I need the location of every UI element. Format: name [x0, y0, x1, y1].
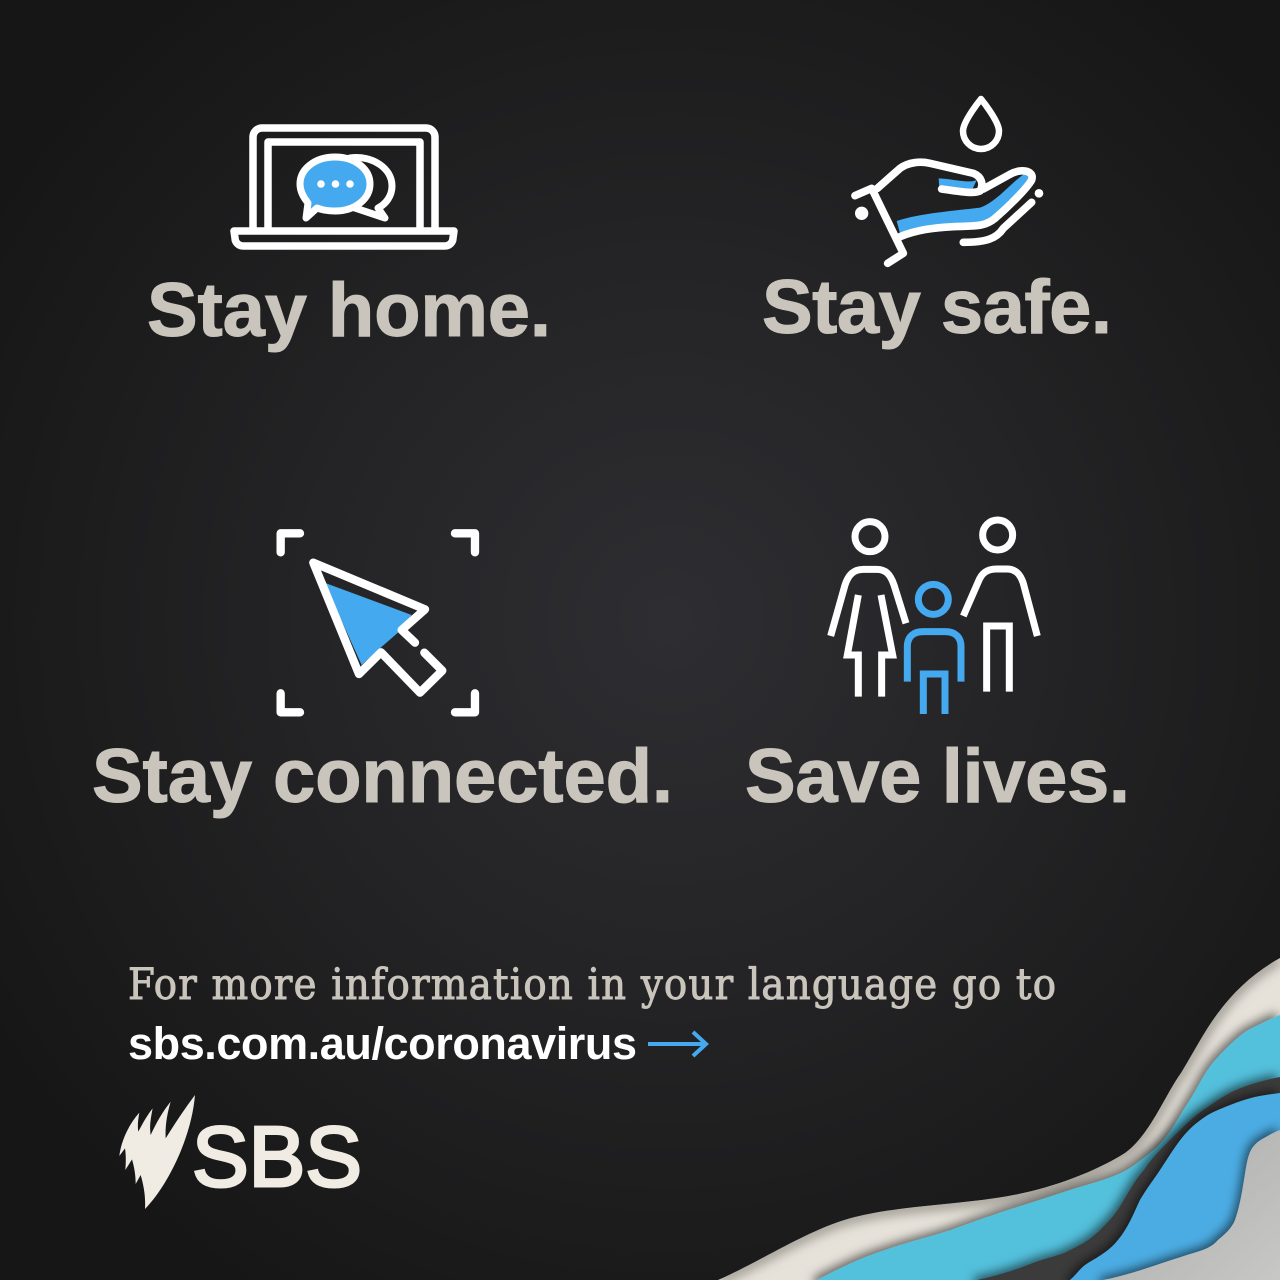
heading: Stay safe: Stay safe.: [762, 265, 1112, 350]
heading: Stay connected: Stay connected.: [92, 734, 673, 819]
text: website address: sbs.com.au/coronavirus: [128, 1018, 637, 1069]
decorative paper waves: [718, 958, 1280, 1280]
text: more information line: For more information in your language go to: [128, 960, 1056, 1010]
heading: Stay home: Stay home.: [147, 268, 551, 353]
icon: laptop with chat bubbles: [234, 128, 454, 246]
heading: Save lives: Save lives.: [745, 734, 1130, 819]
arrow: [648, 1032, 706, 1056]
icon: water drop over hand: [855, 99, 1043, 263]
SBS logo: SBS: [192, 1110, 362, 1205]
icon: cursor arrow in frame: [281, 533, 475, 712]
SBS logo: [119, 1095, 362, 1209]
icon: family: [831, 520, 1037, 714]
